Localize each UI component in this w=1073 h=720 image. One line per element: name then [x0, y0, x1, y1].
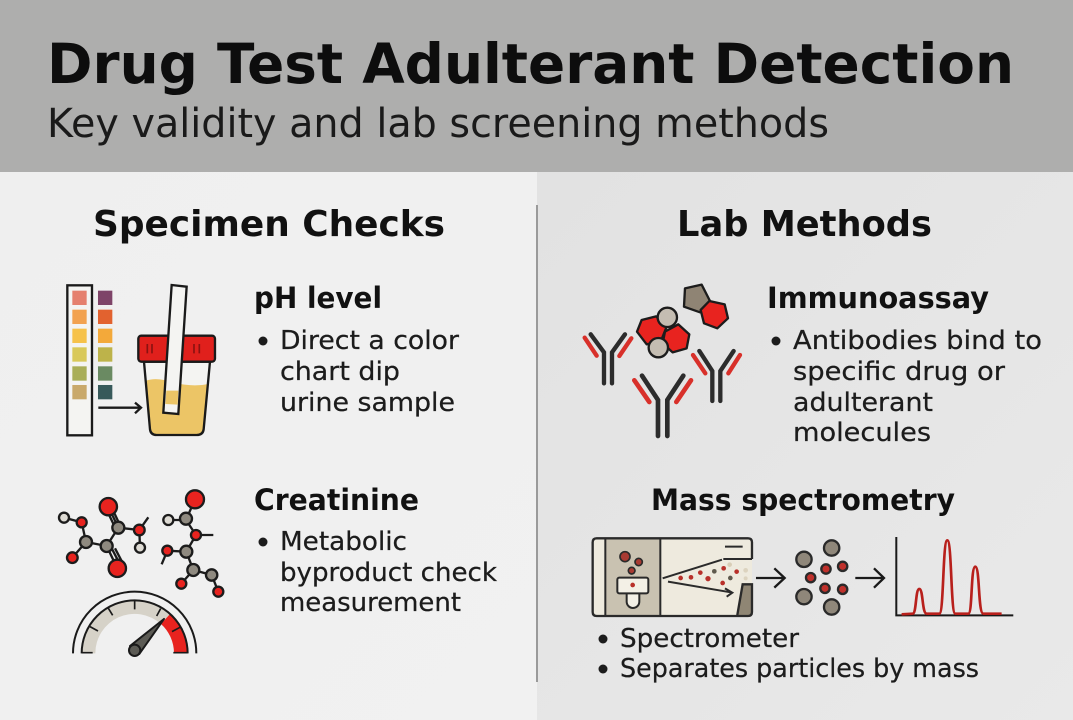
- icon: antibodies and molecules: [585, 285, 740, 436]
- divider: [536, 205, 538, 682]
- text block: pH level: urine sample: [280, 388, 455, 418]
- text block: creatinine: Creatinine: [254, 483, 419, 517]
- text block: spectrometer bullets: Separates particles by mass: [620, 654, 979, 684]
- text block: pH level: Direct a color: [280, 326, 459, 356]
- arrow: [855, 568, 884, 588]
- heading: mass spectrometry: Mass spectrometry: [651, 483, 955, 517]
- spectrometer body: [593, 538, 752, 616]
- text block: pH level: chart dip: [280, 357, 400, 387]
- text block: immunoassay: adulterant: [793, 388, 933, 418]
- subtitle: Key validity and lab screening methods: [47, 101, 829, 147]
- text block: immunoassay: Immunoassay: [767, 281, 989, 315]
- icon: molecules: [59, 490, 223, 597]
- icon: gauge: [73, 592, 196, 656]
- title: Drug Test Adulterant Detection: [47, 32, 1014, 96]
- text block: immunoassay: specific drug or: [793, 357, 1005, 387]
- text block: spectrometer bullets: [598, 624, 979, 684]
- text block: immunoassay: Antibodies bind to: [793, 326, 1042, 356]
- icon: pH color chart and urine cup: [67, 285, 215, 435]
- panel: left background: [0, 172, 537, 720]
- text block: creatinine: byproduct check: [280, 558, 497, 588]
- heading: lab methods: Lab Methods: [677, 204, 932, 245]
- heading: specimen checks: Specimen Checks: [93, 204, 445, 245]
- spectrum chart: [896, 537, 1013, 615]
- text block: pH level: [254, 281, 459, 418]
- text block: creatinine: Metabolic: [280, 527, 407, 557]
- header band: [0, 0, 1073, 172]
- text block: creatinine: [254, 483, 497, 618]
- panel: right background: [537, 172, 1073, 720]
- text block: spectrometer bullets: Spectrometer: [620, 624, 799, 654]
- text block: immunoassay: molecules: [793, 418, 931, 448]
- text block: creatinine: measurement: [280, 588, 461, 618]
- arrow: [756, 568, 785, 588]
- text block: pH level: pH level: [254, 281, 382, 315]
- separated particles: [796, 540, 847, 615]
- icon: mass spectrometer diagram: [593, 537, 1013, 616]
- text block: immunoassay: [767, 281, 1042, 448]
